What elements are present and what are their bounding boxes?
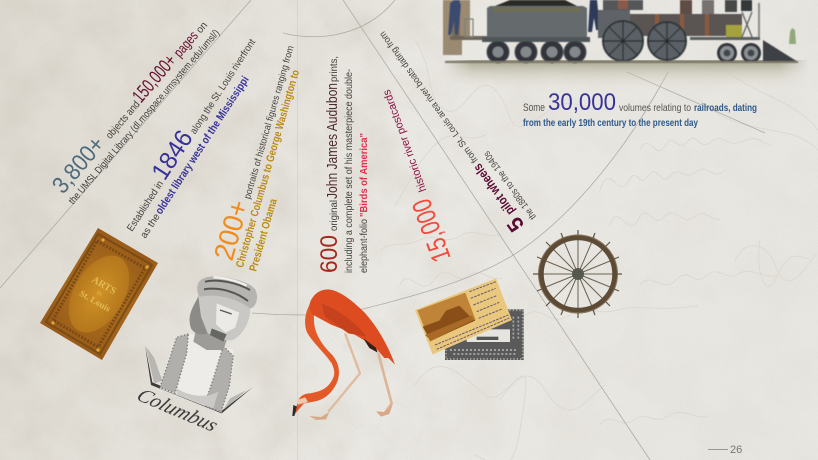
block: Audubon prints: elephant-folio xyxy=(359,219,370,273)
block: established 1846: oldest library west of the Mississippi xyxy=(153,74,252,217)
block: pilot wheels: pilot wheels xyxy=(470,161,517,218)
stat: 30,000: 30,000 xyxy=(548,89,616,116)
block: Audubon prints: John James Audubon xyxy=(324,83,341,199)
label: Columbus signature: Columbus xyxy=(132,385,223,436)
block: digital library: the UMSL Digital Library (dl.mospace.umsystem.edu/umsl/) xyxy=(67,28,222,207)
block: pilot wheels: the 1880s to the 1940s xyxy=(482,149,539,221)
illustration: flamingo xyxy=(292,289,395,420)
stat: 15,000: 15,000 xyxy=(406,195,457,266)
stat: 200+: 200+ xyxy=(208,196,255,264)
book title: IN xyxy=(95,291,103,298)
block: pilot wheels xyxy=(368,21,539,237)
block: established 1846: as the xyxy=(139,212,163,241)
yellow postcard xyxy=(415,278,512,354)
block: railroad volumes: railroads, dating xyxy=(694,102,757,114)
stat: 1846: 1846 xyxy=(146,125,199,185)
block: portraits: Christopher Columbus to George Washington to xyxy=(234,68,302,269)
block: railroad volumes: volumes relating to xyxy=(619,103,691,114)
block: established 1846: along the St. Louis riverfront xyxy=(188,37,258,136)
illustration: postcards xyxy=(415,278,524,360)
block: Audubon prints xyxy=(316,56,370,273)
stat: 3,800+: 3,800+ xyxy=(47,131,110,199)
block: digital library: objects and xyxy=(104,99,143,141)
block: river postcards xyxy=(367,86,457,266)
block: portraits xyxy=(207,40,322,273)
page number xyxy=(708,444,742,456)
engraved certificate xyxy=(445,309,524,360)
block: digital library: on xyxy=(194,19,210,36)
block: railroad volumes: Some xyxy=(523,102,545,114)
block: river postcards: historic river postcards xyxy=(381,87,429,193)
page number: 26 xyxy=(730,444,742,456)
block: pilot wheels: from St. Louis area river boats dating from xyxy=(377,29,480,165)
book title: ARTS xyxy=(90,274,118,297)
book title xyxy=(78,273,122,314)
block: Audubon prints: original xyxy=(329,200,340,231)
block: Audubon prints: prints, xyxy=(329,56,340,82)
illustration: locomotive xyxy=(443,0,808,92)
block: portraits: President Obama xyxy=(248,197,280,273)
wheel handles xyxy=(533,230,622,318)
block: railroad volumes: from the early 19th century to the present day xyxy=(523,117,698,129)
stat: 5 pilot wheels: 5 xyxy=(502,212,529,237)
illustration: ship wheel xyxy=(533,230,622,318)
paper background xyxy=(0,0,490,460)
block: digital library: pages xyxy=(170,28,201,60)
stat: 600: 600 xyxy=(316,235,343,273)
block: Audubon prints: including a complete set of his masterpiece double- xyxy=(344,69,355,273)
block: established 1846 xyxy=(114,29,271,242)
block: established 1846: Established in xyxy=(125,179,166,234)
faint handwriting background xyxy=(380,40,818,460)
book title: St. Louis xyxy=(78,288,113,314)
block: railroad volumes xyxy=(523,89,757,129)
illustration: Columbus bust xyxy=(145,276,257,413)
illustration: book cover xyxy=(40,228,158,360)
block: portraits: portraits of historical figures ranging from xyxy=(242,44,297,200)
block: Audubon prints: "Birds of America" xyxy=(358,133,370,217)
stat: 150,000+: 150,000+ xyxy=(129,51,181,107)
